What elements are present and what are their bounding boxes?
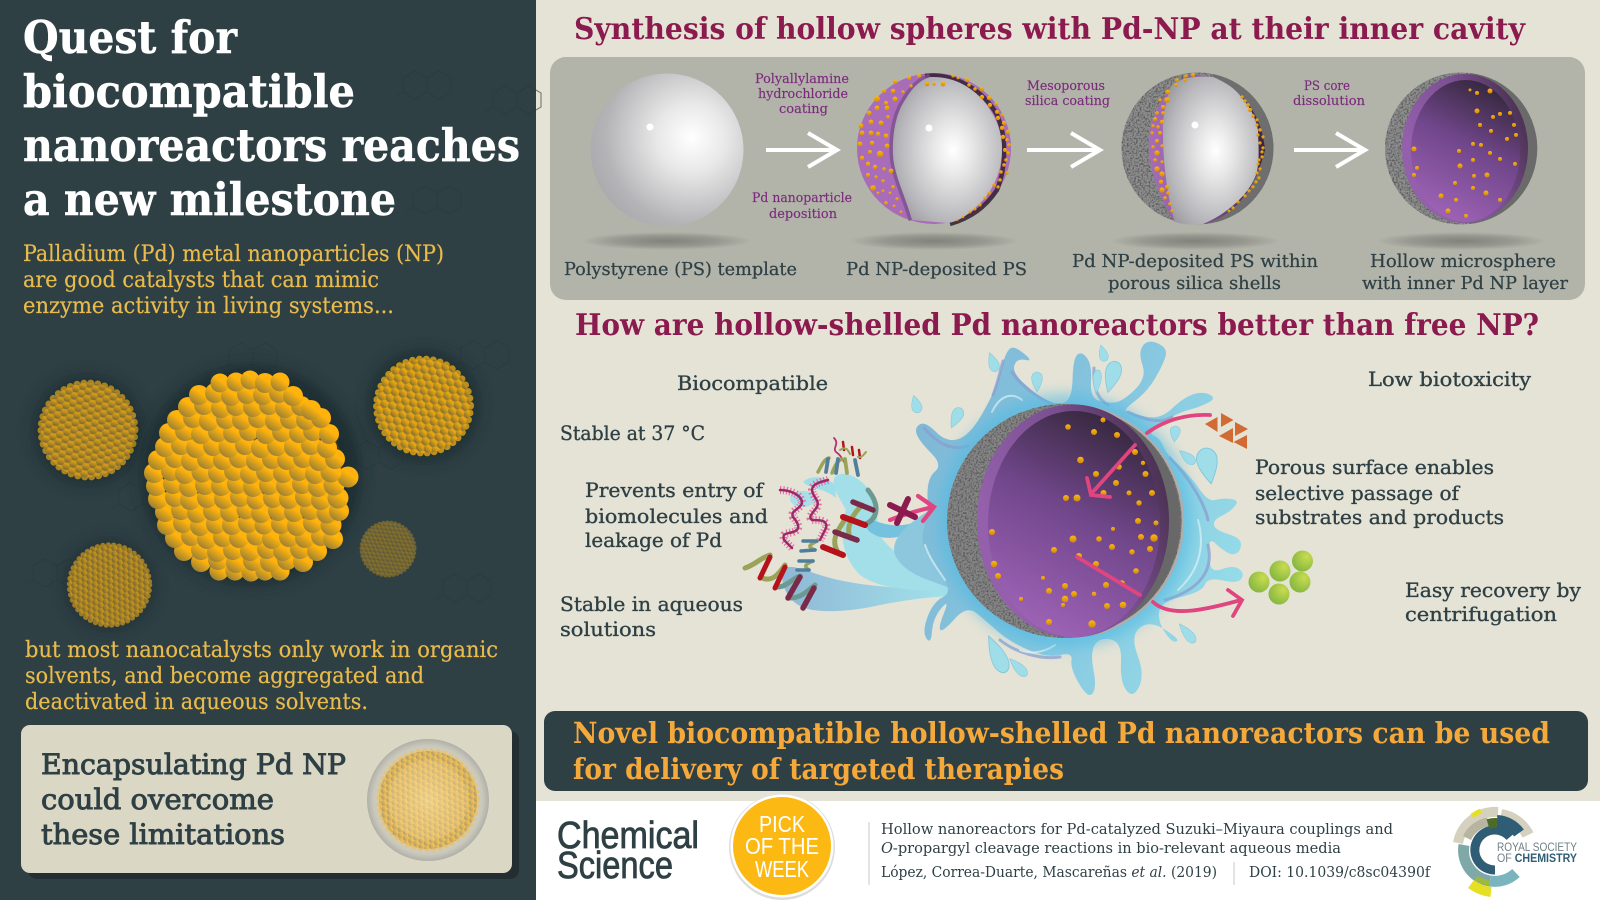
icon: DNA biomolecules — [745, 438, 876, 608]
sphere: Pd NP within silica shell: porous silica shells — [1108, 273, 1281, 294]
title: a new milestone — [23, 173, 396, 226]
sphere: Pd NP deposited PS: Pd NP-deposited PS — [846, 259, 1027, 280]
text: porous surface: substrates and products — [1255, 505, 1504, 529]
icon: product spheres — [1248, 550, 1313, 604]
nanoparticle: large cluster — [141, 365, 361, 585]
title: biocompatible — [23, 65, 355, 118]
badge: pick of the week — [729, 794, 835, 900]
water splash — [782, 342, 1243, 695]
text: limitations of nanocatalysts: solvents, and become aggregated and — [25, 664, 424, 689]
sphere: polystyrene template — [564, 74, 797, 280]
text: porous surface — [1255, 455, 1504, 529]
text: step 2 conditions: silica coating — [1025, 94, 1110, 109]
sphere: shell — [947, 404, 1183, 638]
text: step 1 conditions: deposition — [769, 207, 838, 222]
sphere: polystyrene template: Polystyrene (PS) template — [564, 259, 797, 280]
badge: pick of the week: PICK — [759, 811, 806, 837]
logo: Chemical Science: Science — [557, 845, 673, 887]
text: porous surface: Porous surface enables — [1255, 455, 1494, 479]
text: citation: DOI: 10.1039/c8sc04390f — [1249, 865, 1432, 881]
callout: encapsulating Pd NP — [21, 725, 519, 879]
title — [23, 11, 520, 226]
text: stable in aqueous solutions: Stable in aqueous — [560, 592, 743, 616]
palladium nanoparticles — [989, 418, 1158, 628]
text: low biotoxicity: Low biotoxicity — [1368, 367, 1532, 391]
text: prevents entry — [585, 478, 768, 552]
text: palladium intro: enzyme activity in living systems... — [23, 294, 394, 319]
title: nanoreactors reaches — [23, 119, 520, 172]
text: step 2 conditions: Mesoporous — [1027, 79, 1105, 94]
text: palladium intro — [23, 242, 444, 319]
text: step 3 conditions — [1293, 79, 1366, 109]
text: step 3 conditions: PS core — [1304, 79, 1350, 94]
logo: Royal Society of Chemistry: OF CHEMISTRY — [1497, 853, 1577, 865]
arrow: step 1 — [766, 133, 837, 167]
text: limitations of nanocatalysts: deactivated in aqueous solvents. — [25, 690, 368, 715]
heading: comparison: How are hollow-shelled Pd nanoreactors better than free NP? — [575, 308, 1539, 343]
nanoparticle: lower left — [64, 539, 156, 631]
arrow: step 2 — [1027, 133, 1100, 167]
panel: left introduction — [0, 0, 541, 900]
arrow: product exit — [1077, 557, 1242, 616]
text: prevents entry: biomolecules and — [585, 504, 768, 528]
footer — [536, 794, 1600, 900]
text: citation: Hollow nanoreactors for Pd-catalyzed Suzuki–Miyaura couplings and — [881, 822, 1393, 838]
banner: conclusion — [544, 711, 1588, 791]
text: step 1 conditions — [752, 72, 852, 222]
text: stable in aqueous solutions: solutions — [560, 617, 656, 641]
text: limitations of nanocatalysts: but most nanocatalysts only work in organic — [25, 638, 498, 663]
sphere: Pd NP within silica shell: Pd NP-deposited PS within — [1072, 251, 1318, 272]
text: biocompatible: Biocompatible — [677, 371, 828, 395]
text: citation: O-propargyl cleavage reactions in bio-relevant aqueous media — [881, 841, 1341, 857]
text: citation: López, Correa-Duarte, Mascareñas et al. (2019) — [881, 865, 1217, 881]
nanoparticle: upper right — [368, 350, 480, 462]
text: porous surface: selective passage of — [1255, 481, 1461, 505]
text: easy recovery: centrifugation — [1405, 602, 1557, 626]
callout: encapsulating Pd NP: Encapsulating Pd NP — [41, 748, 346, 781]
title: Quest for — [23, 11, 238, 64]
text: prevents entry: leakage of Pd — [585, 528, 722, 552]
sphere: Pd NP within silica shell — [1072, 72, 1318, 294]
text: step 1 conditions: coating — [779, 102, 828, 117]
text: stable in aqueous solutions — [560, 592, 743, 641]
logo: Chemical Science: Chemical — [557, 815, 699, 857]
arrow: step 3 — [1294, 133, 1365, 167]
sphere: Pd NP deposited PS — [846, 73, 1027, 280]
text: limitations of nanocatalysts — [25, 638, 498, 715]
badge: pick of the week: WEEK — [755, 856, 810, 882]
logo: Chemical Science — [557, 815, 699, 887]
arrow: blocked entry — [890, 496, 934, 523]
banner: conclusion: for delivery of targeted therapies — [573, 752, 1064, 786]
text: step 3 conditions: dissolution — [1293, 94, 1366, 109]
sphere: hollow microsphere — [1362, 72, 1568, 294]
arrow: substrate entry — [1087, 415, 1210, 497]
callout: encapsulating Pd NP: these limitations — [41, 818, 285, 851]
icon: encapsulated nanoparticle — [367, 739, 489, 861]
text: step 1 conditions: Pd nanoparticle — [752, 191, 852, 206]
text: step 1 conditions: hydrochloride — [758, 87, 848, 102]
text: step 2 conditions — [1025, 79, 1110, 109]
nanoparticle: small faded — [362, 522, 414, 576]
text: prevents entry: Prevents entry of — [585, 478, 765, 502]
icon: substrate triangles — [1205, 413, 1248, 449]
sphere: hollow microsphere: with inner Pd NP layer — [1362, 273, 1568, 294]
text: palladium intro: are good catalysts that can mimic — [23, 268, 379, 293]
illustration: hollow nanoreactor in water splash — [745, 342, 1313, 695]
badge: pick of the week: OF THE — [745, 833, 819, 859]
text: easy recovery — [1405, 578, 1582, 626]
text: palladium intro: Palladium (Pd) metal nanoparticles (NP) — [23, 242, 444, 267]
nanoparticle: upper left — [32, 374, 144, 486]
text: stable at 37 C: Stable at 37 °C — [560, 421, 705, 445]
text: step 1 conditions: Polyallylamine — [755, 72, 849, 87]
sphere: hollow microsphere: Hollow microsphere — [1370, 251, 1556, 272]
panel: synthesis steps — [550, 57, 1585, 300]
logo: Royal Society of Chemistry: ROYAL SOCIETY — [1497, 842, 1577, 854]
callout: encapsulating Pd NP: could overcome — [41, 783, 274, 816]
text: citation — [881, 822, 1432, 881]
text: easy recovery: Easy recovery by — [1405, 578, 1582, 602]
heading: synthesis: Synthesis of hollow spheres with Pd-NP at their inner cavity — [574, 12, 1526, 47]
logo: Royal Society of Chemistry — [1458, 811, 1579, 892]
